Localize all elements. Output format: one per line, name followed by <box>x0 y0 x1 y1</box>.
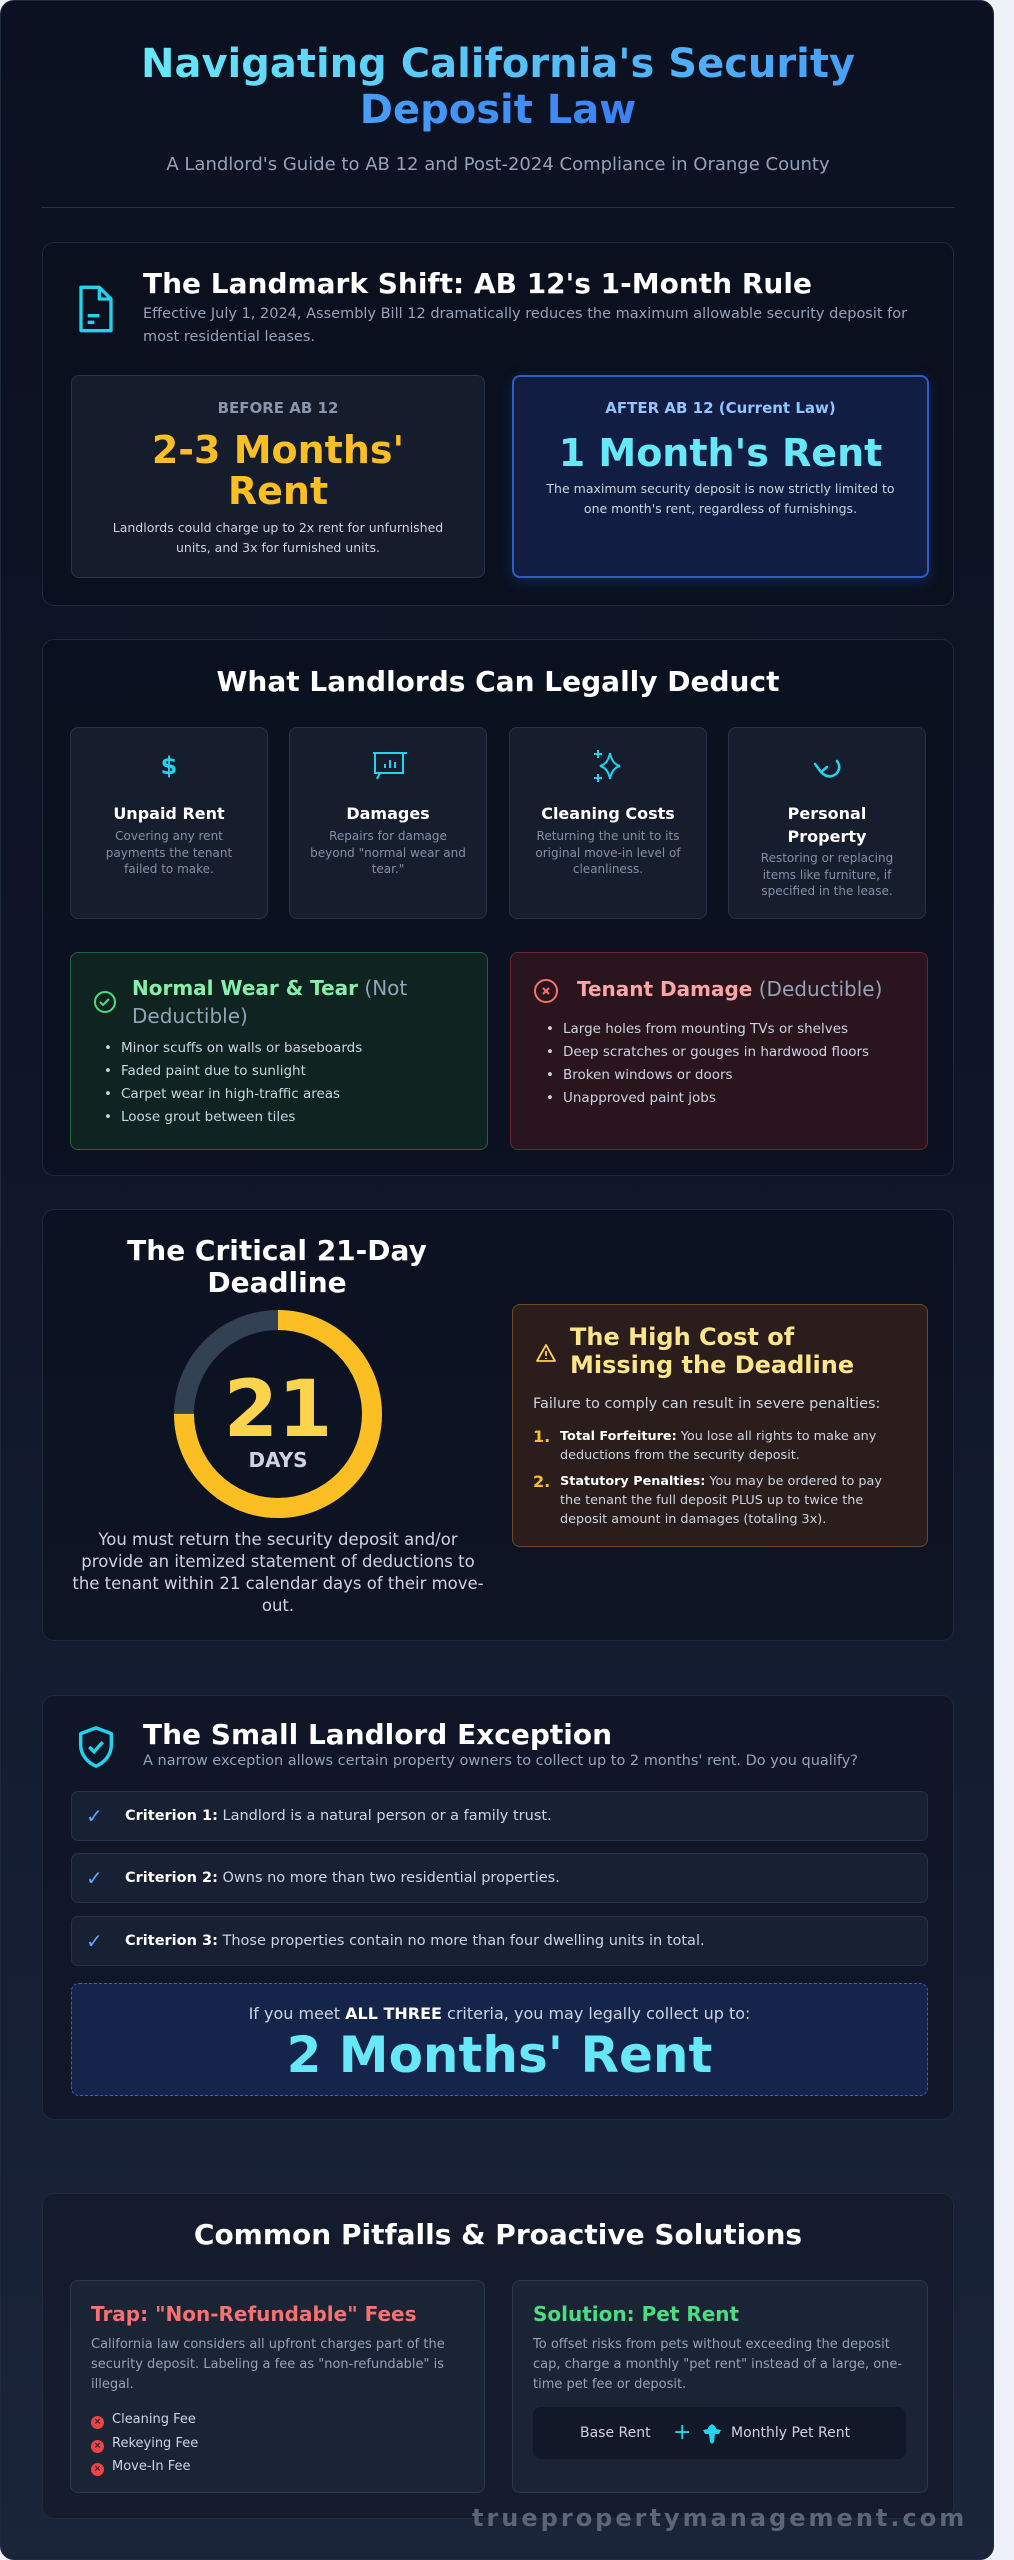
card: cleaning <box>509 727 707 919</box>
trap box: California law considers all upfront charges part of the security deposit. Labeling a fee as "non-refundable" is illegal. <box>91 2337 445 2392</box>
callout: high cost: 2. <box>533 1472 550 1491</box>
tenant damage box: Broken windows or doors <box>563 1067 733 1083</box>
panel: what landlords can deduct <box>42 639 954 1176</box>
ring chart: 21 days: 21 <box>224 1365 332 1455</box>
card: personal property <box>728 727 926 919</box>
fee list: Cleaning Fee <box>112 2412 196 2427</box>
title: Deposit Law <box>360 87 636 133</box>
tenant damage box: Tenant Damage (Deductible) <box>577 977 882 1001</box>
card: unpaid rent <box>70 727 268 919</box>
icon: shield check <box>78 1726 114 1768</box>
pet rent formula <box>533 2407 906 2459</box>
heading: Common Pitfalls & Proactive Solutions <box>194 2218 802 2251</box>
description: Effective July 1, 2024, Assembly Bill 12 dramatically reduces the maximum allowable security deposit for most residential leases. <box>143 306 907 345</box>
tenant damage box <box>510 952 928 1150</box>
fee list: × <box>94 2464 101 2474</box>
fee list <box>91 2412 198 2476</box>
fee list: Move-In Fee <box>112 2459 191 2474</box>
result callout: If you meet ALL THREE criteria, you may legally collect up to: <box>249 2004 750 2023</box>
fee list: Rekeying Fee <box>112 2436 198 2450</box>
panel: small landlord exception <box>42 1695 954 2120</box>
card: damages: Repairs for damage beyond "normal wear and tear." <box>310 829 466 876</box>
before box <box>71 375 485 578</box>
card: personal property: Restoring or replacing items like furniture, if specified in the lease. <box>761 851 893 898</box>
criterion 2: ✓ <box>86 1866 103 1890</box>
deadline text: You must return the security deposit and/or provide an itemized statement of deductions to the tenant within 21 calendar days of their move-out. <box>72 1530 484 1615</box>
card: personal property: Property <box>788 827 866 846</box>
normal wear box: Minor scuffs on walls or baseboards <box>121 1040 362 1056</box>
card: unpaid rent: Unpaid Rent <box>113 804 225 823</box>
icon: pet <box>703 2424 721 2444</box>
pet rent formula: + <box>673 2420 691 2445</box>
callout: high cost: 1. <box>533 1427 550 1446</box>
card: unpaid rent: Covering any rent payments the tenant failed to make. <box>106 829 232 876</box>
icon: return arrow <box>814 760 841 778</box>
heading: What Landlords Can Legally Deduct <box>217 665 779 698</box>
callout: high cost <box>512 1304 928 1547</box>
icon: check circle <box>94 991 116 1013</box>
callout: high cost: Total Forfeiture: You lose all rights to make any deductions from the security deposit. <box>560 1429 876 1463</box>
icon: sparkles <box>594 750 620 782</box>
heading <box>127 1234 427 1299</box>
criterion 3: ✓ <box>86 1929 103 1953</box>
trap box: Trap: "Non-Refundable" Fees <box>91 2302 416 2326</box>
tenant damage box: Large holes from mounting TVs or shelves <box>563 1021 848 1037</box>
fee list: × <box>94 2440 101 2450</box>
panel: AB 12 landmark shift <box>42 242 954 606</box>
callout: high cost: The High Cost of <box>570 1323 794 1351</box>
tenant damage box: Deep scratches or gouges in hardwood floors <box>563 1044 869 1060</box>
icon: document <box>79 286 113 332</box>
normal wear box: Carpet wear in high-traffic areas <box>121 1086 340 1102</box>
fee list: × <box>94 2417 101 2427</box>
criterion 1: Criterion 1: Landlord is a natural person or a family trust. <box>125 1808 552 1824</box>
heading: The Critical 21-Day <box>127 1234 427 1267</box>
before box: 2-3 Months' <box>152 428 404 472</box>
icon: warning <box>536 1344 556 1362</box>
title: Navigating California's Security <box>141 41 855 87</box>
icon: x circle <box>534 979 558 1003</box>
watermark: truepropertymanagement.com <box>472 2504 967 2532</box>
subtitle: A Landlord's Guide to AB 12 and Post-2024 Compliance in Orange County <box>166 154 830 175</box>
pet rent formula: Monthly Pet Rent <box>731 2425 850 2441</box>
icon: dollar: $ <box>161 752 177 780</box>
ring chart: 21 days <box>174 1310 382 1518</box>
heading: The Landmark Shift: AB 12's 1-Month Rule <box>143 267 812 300</box>
normal wear box <box>70 952 488 1150</box>
solution box <box>512 2280 928 2493</box>
heading: Deadline <box>207 1266 347 1299</box>
after box: AFTER AB 12 (Current Law) <box>605 399 836 417</box>
tenant damage box: Unapproved paint jobs <box>563 1090 716 1106</box>
card: damages: Damages <box>346 804 430 823</box>
before box: BEFORE AB 12 <box>218 399 338 417</box>
criterion 1 <box>71 1791 928 1841</box>
icon: chart board <box>373 752 407 780</box>
card: cleaning: Returning the unit to its original move-in level of cleanliness. <box>535 829 681 876</box>
before box: Rent <box>228 469 328 513</box>
criterion 3 <box>71 1916 928 1966</box>
normal wear box: Loose grout between tiles <box>121 1109 295 1125</box>
result callout <box>71 1983 928 2096</box>
panel: small landlord exception: A narrow exception allows certain property owners to collect up to 2 months' rent. Do you qualify? <box>143 1753 858 1769</box>
pet rent formula: Base Rent <box>580 2425 651 2441</box>
criterion 1: ✓ <box>86 1804 103 1828</box>
title <box>141 41 855 133</box>
card: damages <box>289 727 487 919</box>
criterion 3: Criterion 3: Those properties contain no more than four dwelling units in total. <box>125 1933 705 1949</box>
solution box: To offset risks from pets without exceeding the deposit cap, charge a monthly "pet rent" instead of a large, one-time pet fee or deposit. <box>533 2337 902 2392</box>
card: personal property: Personal <box>788 804 866 823</box>
before box: Landlords could charge up to 2x rent for unfurnished units, and 3x for furnished units. <box>113 520 443 555</box>
after box: The maximum security deposit is now strictly limited to one month's rent, regardless of furnishings. <box>546 481 895 516</box>
criterion 2 <box>71 1853 928 1903</box>
heading: The Small Landlord Exception <box>143 1718 612 1751</box>
callout: high cost: Failure to comply can result in severe penalties: <box>533 1396 880 1412</box>
normal wear box: Normal Wear & Tear (Not Deductible) <box>132 976 407 1028</box>
callout: high cost: Missing the Deadline <box>570 1351 854 1379</box>
panel: pitfalls & solutions <box>42 2193 954 2519</box>
solution box: Solution: Pet Rent <box>533 2302 739 2326</box>
ring chart: 21 days: DAYS <box>248 1448 308 1472</box>
criterion 2: Criterion 2: Owns no more than two residential properties. <box>125 1870 560 1886</box>
result callout: 2 Months' Rent <box>287 2026 712 2084</box>
after box: 1 Month's Rent <box>559 431 882 475</box>
after box <box>512 375 929 578</box>
callout: high cost: Statutory Penalties: You may be ordered to pay the tenant the full deposit PLUS up to twice the deposit amount in damages (totaling 3x). <box>560 1474 882 1527</box>
panel: 21-day deadline <box>42 1209 954 1641</box>
card: cleaning: Cleaning Costs <box>541 804 675 823</box>
normal wear box: Faded paint due to sunlight <box>121 1063 306 1079</box>
trap box <box>70 2280 485 2493</box>
